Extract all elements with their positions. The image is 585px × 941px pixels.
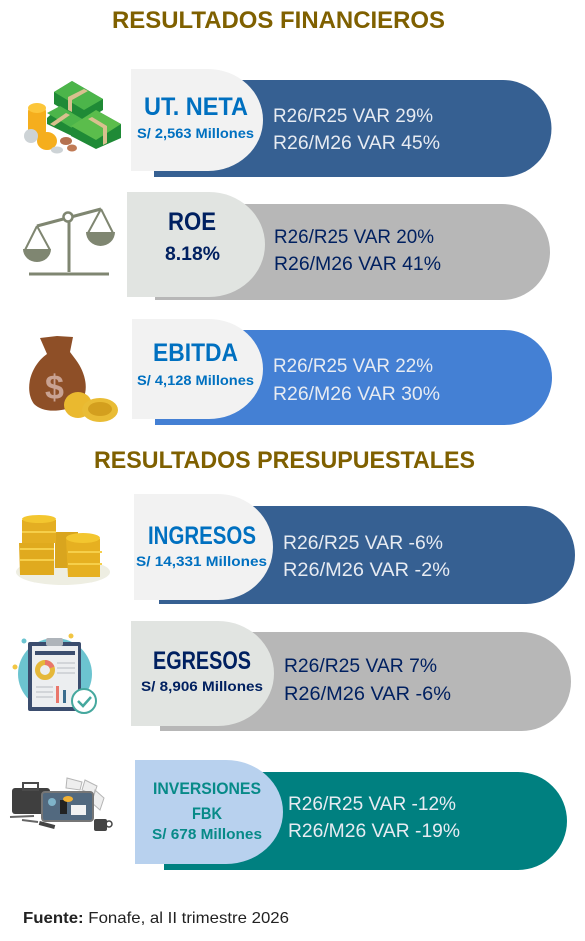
heading: ingresos: INGRESOS [148, 522, 256, 550]
variations: ROE [274, 226, 441, 275]
variations: utilidad neta [273, 105, 440, 154]
label card: egresos [131, 621, 274, 726]
variations: ingresos: R26/R25 VAR -6% [283, 532, 443, 554]
panel: ROE [127, 192, 550, 300]
label card: ingresos [134, 494, 273, 600]
icon: money stacks [24, 81, 121, 154]
icon: clipboard report [12, 634, 96, 713]
panel: inversiones [135, 760, 567, 870]
variations: inversiones: R26/R25 VAR -12% [288, 793, 456, 815]
value: ingresos: S/ 14,331 Millones [136, 554, 267, 569]
heading: inversiones: INVERSIONES [153, 780, 261, 798]
variations: ingresos [283, 532, 450, 581]
icon: gold coins [16, 515, 110, 585]
bar: ingresos [159, 506, 575, 604]
title: resultados presupuestales: RESULTADOS PRESUPUESTALES [94, 447, 475, 474]
heading: EBITDA: EBITDA [153, 339, 238, 367]
variations: EBITDA: R26/M26 VAR 30% [273, 383, 440, 405]
value: inversiones: S/ 678 Millones [152, 826, 262, 843]
variations: ROE: R26/R25 VAR 20% [274, 226, 434, 248]
label card: ROE [127, 192, 265, 297]
heading: FBK: FBK [192, 805, 222, 823]
value: ROE: 8.18% [165, 244, 220, 265]
bar: ROE [155, 204, 550, 300]
variations: ingresos: R26/M26 VAR -2% [283, 559, 450, 581]
bar: EBITDA [155, 330, 552, 425]
icon: workspace laptop [10, 778, 112, 831]
variations: utilidad neta: R26/M26 VAR 45% [273, 132, 440, 154]
variations: egresos: R26/M26 VAR -6% [284, 683, 451, 705]
source note: Fuente: Fonafe, al II trimestre 2026 [23, 910, 289, 927]
variations: egresos [284, 655, 451, 705]
panel: utilidad neta [131, 69, 551, 177]
title: resultados financieros: RESULTADOS FINANCIEROS [112, 7, 445, 34]
value: EBITDA: S/ 4,128 Millones [137, 373, 254, 388]
panel: EBITDA [132, 319, 552, 425]
panel: ingresos [134, 494, 575, 604]
bar: utilidad neta [154, 80, 551, 177]
variations: EBITDA [273, 355, 440, 405]
variations: ROE: R26/M26 VAR 41% [274, 253, 441, 275]
bar: egresos [160, 632, 571, 731]
value: egresos: S/ 8,906 Millones [141, 679, 263, 694]
panel: egresos [131, 621, 571, 731]
variations: EBITDA: R26/R25 VAR 22% [273, 355, 433, 377]
icon: money bag [29, 336, 118, 422]
heading: ROE: ROE [168, 208, 216, 236]
value: utilidad neta: S/ 2,563 Millones [137, 126, 254, 141]
variations: inversiones [288, 793, 460, 842]
icon: balance scale [23, 209, 115, 274]
variations: egresos: R26/R25 VAR 7% [284, 655, 437, 677]
label card: EBITDA [132, 319, 263, 419]
icon: money bag: $ [45, 369, 64, 407]
label card: inversiones [135, 760, 283, 864]
variations: inversiones: R26/M26 VAR -19% [288, 820, 460, 842]
bar: inversiones [164, 772, 567, 870]
heading: egresos: EGRESOS [153, 647, 251, 675]
variations: utilidad neta: R26/R25 VAR 29% [273, 105, 433, 127]
label card: utilidad neta [131, 69, 263, 171]
heading: UT. NETA: UT. NETA [144, 93, 248, 121]
